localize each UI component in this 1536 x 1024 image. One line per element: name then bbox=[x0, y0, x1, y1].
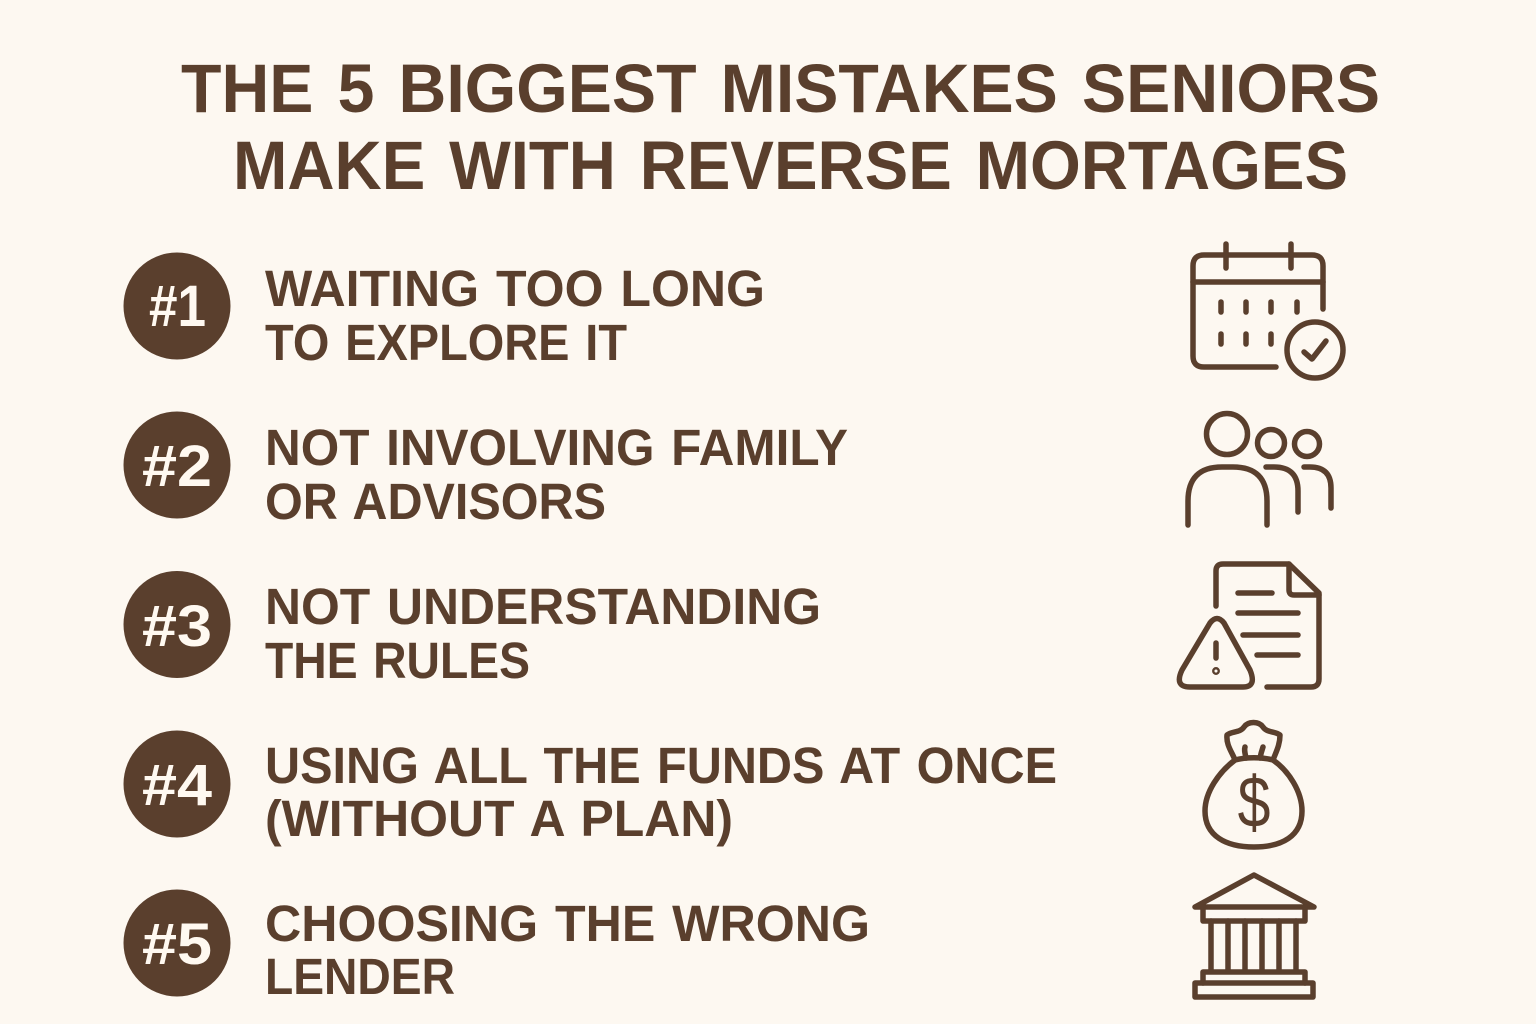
icon: document with warning bbox=[1179, 564, 1319, 687]
icon: money bag: $ bbox=[1238, 761, 1270, 842]
icon: money bag bbox=[1205, 722, 1302, 847]
title bbox=[181, 50, 1380, 204]
number badge 1: #1 bbox=[149, 274, 206, 339]
text: mistake 2: NOT INVOLVING FAMILY bbox=[265, 419, 848, 476]
panel: mistake 3 bbox=[124, 564, 1319, 689]
panel: mistake 4 bbox=[124, 722, 1302, 847]
title: MAKE WITH REVERSE MORTAGES bbox=[233, 127, 1348, 204]
text: mistake 4 bbox=[265, 737, 1057, 847]
number badge 3: #3 bbox=[142, 594, 212, 659]
text: mistake 1: WAITING TOO LONG bbox=[265, 260, 765, 317]
text: mistake 3 bbox=[265, 578, 821, 689]
text: mistake 2 bbox=[265, 419, 848, 530]
icon: bank building bbox=[1195, 875, 1314, 997]
number badge 2: #2 bbox=[142, 434, 212, 499]
number badge 2 bbox=[124, 412, 230, 518]
text: mistake 5: LENDER bbox=[265, 948, 455, 1005]
number badge 4: #4 bbox=[142, 753, 212, 818]
text: mistake 5: CHOOSING THE WRONG bbox=[265, 895, 870, 952]
text: mistake 5 bbox=[265, 895, 870, 1005]
icon: calendar with check bbox=[1193, 244, 1343, 378]
number badge 5: #5 bbox=[142, 912, 212, 977]
panel: mistake 5 bbox=[124, 875, 1314, 1005]
title: THE 5 BIGGEST MISTAKES SENIORS bbox=[181, 50, 1380, 127]
text: mistake 4: (WITHOUT A PLAN) bbox=[265, 790, 733, 847]
text: mistake 1: TO EXPLORE IT bbox=[265, 314, 627, 371]
panel: mistake 2 bbox=[124, 412, 1331, 530]
number badge 4 bbox=[124, 730, 230, 838]
text: mistake 4: USING ALL THE FUNDS AT ONCE bbox=[265, 737, 1057, 794]
panel: mistake 1 bbox=[124, 244, 1343, 378]
number badge 1 bbox=[124, 252, 230, 360]
text: mistake 1 bbox=[265, 260, 765, 371]
text: mistake 2: OR ADVISORS bbox=[265, 473, 606, 530]
text: mistake 3: NOT UNDERSTANDING bbox=[265, 578, 821, 635]
text: mistake 3: THE RULES bbox=[265, 632, 530, 689]
number badge 5 bbox=[124, 890, 230, 996]
icon: family group bbox=[1188, 414, 1331, 525]
number badge 3 bbox=[124, 571, 230, 678]
